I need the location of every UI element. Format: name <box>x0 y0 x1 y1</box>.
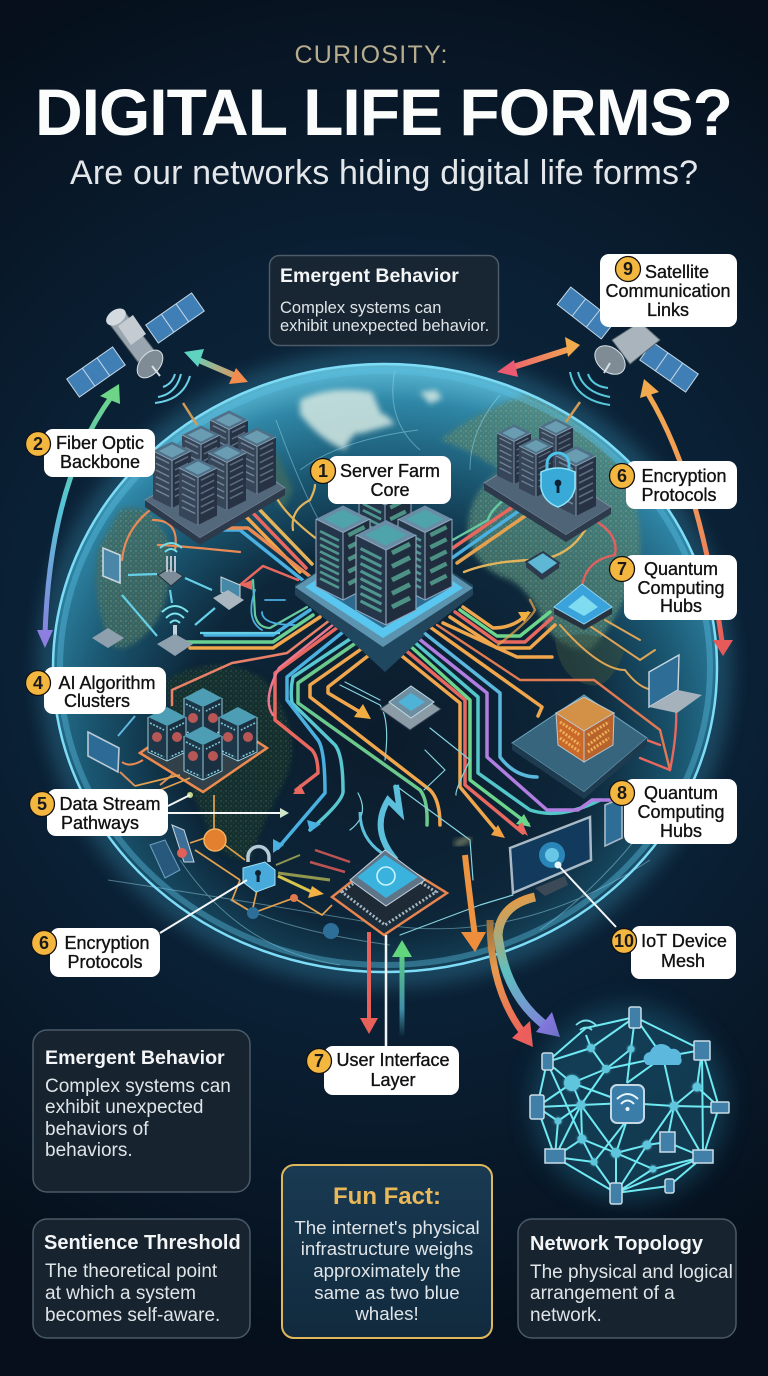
arrows: to network mesh <box>490 897 560 1047</box>
mesh edges <box>537 1017 719 1193</box>
satellite body <box>103 305 168 383</box>
land: dark southern continent <box>165 665 292 860</box>
badge 4 <box>26 670 50 696</box>
badge 10: 10 <box>614 931 634 951</box>
label 7: user interface layer <box>306 1046 459 1095</box>
body text: at which a system <box>45 1283 196 1304</box>
label 5: data stream pathways <box>30 789 168 836</box>
heading: Network Topology <box>530 1233 704 1255</box>
body text: arrangement of a <box>530 1283 675 1304</box>
label 6: encryption top: Protocols <box>641 485 717 505</box>
signal arcs <box>155 374 190 403</box>
label 6: encryption bottom: Encryption <box>64 933 150 953</box>
label 9: satellite links: Communication <box>605 281 731 301</box>
badge 6: 6 <box>39 933 49 953</box>
icon: phone near label 8 <box>605 798 622 846</box>
label 1: server farm core: Server Farm <box>340 461 440 481</box>
label 4: AI algorithm clusters: Clusters <box>64 691 130 711</box>
mesh nodes <box>554 1044 702 1172</box>
heading: Emergent Behavior <box>45 1047 225 1069</box>
land: right continent <box>440 395 641 650</box>
central lower processor chip <box>332 785 447 935</box>
arrows: user interface layer <box>360 932 412 1046</box>
orange arrow from chip <box>455 838 486 952</box>
panel: sentience threshold <box>33 1219 250 1338</box>
main title: DIGITAL LIFE FORMS? <box>35 75 733 149</box>
body text: Complex systems can <box>45 1076 231 1097</box>
small chip centre <box>380 686 441 730</box>
body text: behaviors of <box>45 1119 149 1140</box>
label 6: encryption bottom: Protocols <box>67 952 143 972</box>
panel: fun fact <box>282 1165 492 1338</box>
badge 1 <box>310 458 336 484</box>
body text: same as two blue <box>314 1282 460 1303</box>
server cluster: encryption with padlock <box>484 418 611 542</box>
arrow: satellite to globe left <box>184 349 248 384</box>
node links <box>135 775 332 915</box>
server cluster: fiber backbone <box>145 410 285 545</box>
label 1: server farm core <box>310 456 451 504</box>
body text: The internet's physical <box>294 1217 480 1238</box>
label 8: quantum hubs: Computing <box>637 802 725 822</box>
heading: Sentience Threshold <box>44 1232 241 1254</box>
body text: The physical and logical <box>530 1262 733 1283</box>
body text: behaviors. <box>45 1140 133 1161</box>
icon: wifi tower <box>158 543 183 586</box>
label 7: quantum hubs: Computing <box>637 578 725 598</box>
label 5: data stream pathways: Pathways <box>61 813 139 833</box>
chip: quantum hub <box>554 584 612 630</box>
label 7: user interface layer: Layer <box>370 1070 416 1090</box>
callout leader lines <box>160 795 616 933</box>
solar panel lower <box>67 347 125 397</box>
icon: desktop monitor <box>510 817 591 896</box>
icon: tablet left <box>88 732 119 772</box>
label 9: satellite links <box>600 254 737 327</box>
thin circuit traces <box>340 682 513 935</box>
heading: Emergent Behavior <box>280 265 459 287</box>
label 9: satellite links: Satellite <box>645 262 709 282</box>
network mesh diagram <box>530 1005 729 1204</box>
badge 6: 6 <box>617 466 627 486</box>
AI algorithm cluster <box>140 688 267 792</box>
label 2: fiber optic backbone <box>26 429 155 477</box>
panel: network topology <box>518 1219 736 1338</box>
wire arrowheads <box>240 580 531 853</box>
body text: Complex systems can <box>280 299 441 317</box>
label 2: fiber optic backbone: Backbone <box>60 452 140 472</box>
devices <box>530 1007 729 1204</box>
heading: Fun Fact: <box>333 1183 441 1210</box>
subtitle: Are our networks hiding digital life forms? <box>70 154 698 192</box>
platform: central server farm base <box>295 479 473 672</box>
land: northern pale continent <box>300 390 442 450</box>
wires: lower-right bundle <box>397 607 670 835</box>
title block <box>35 41 733 192</box>
label 2: fiber optic backbone: Fiber Optic <box>56 433 144 453</box>
arrow: long left arc <box>37 384 120 648</box>
badge 7: 7 <box>314 1051 324 1071</box>
label 6: encryption bottom <box>32 928 160 977</box>
icon: central wifi tablet <box>611 1085 644 1123</box>
label 8: quantum hubs: Hubs <box>660 821 702 841</box>
solar panel upper <box>557 287 615 339</box>
eyebrow: curiosity: CURIOSITY: <box>294 41 448 69</box>
label 7: quantum hubs: Quantum <box>644 559 718 579</box>
label 8: quantum hubs: Quantum <box>644 783 718 803</box>
body text: network. <box>530 1305 602 1326</box>
icon: wifi <box>576 1020 596 1030</box>
encryption mesh lower left <box>135 775 350 939</box>
badge 4: 4 <box>33 673 43 693</box>
arrows from padlock <box>276 850 350 898</box>
chip: quantum small <box>526 552 559 580</box>
label 10: IoT device mesh: Mesh <box>661 951 705 971</box>
icon: gateway box left <box>92 628 124 648</box>
icon: orange coin <box>204 829 226 851</box>
satellite right <box>557 287 698 422</box>
land speckle south <box>165 665 292 860</box>
icon: central server racks <box>316 479 452 625</box>
land speckle right <box>440 395 641 650</box>
label 9: satellite links: Links <box>647 300 689 320</box>
badge 8: 8 <box>617 783 627 803</box>
badge 5: 5 <box>37 794 47 814</box>
label 7: quantum hubs: Hubs <box>660 596 702 616</box>
wires: upper-right to lock cluster <box>442 495 676 770</box>
icon: padlock <box>243 846 275 892</box>
left device network <box>88 543 280 786</box>
satellite left <box>67 293 204 425</box>
label 10: IoT device mesh <box>612 926 736 979</box>
label 6: encryption top: Encryption <box>641 466 727 486</box>
icon: laptop <box>649 655 702 713</box>
satellite body <box>589 322 660 380</box>
badge 7: 7 <box>617 559 627 579</box>
callout terminals <box>280 808 562 868</box>
icon: curved up arrow <box>360 785 400 860</box>
body text: The theoretical point <box>45 1261 218 1282</box>
panel: emergent behavior top <box>270 256 498 346</box>
solar panel upper <box>146 293 204 343</box>
label 6: encryption top <box>610 461 737 509</box>
body text: whales! <box>354 1303 419 1324</box>
label 7: quantum hubs <box>610 555 737 620</box>
label 1: server farm core: Core <box>370 480 410 500</box>
badge 9: 9 <box>623 259 633 279</box>
data wires <box>122 480 676 935</box>
land speckle left <box>96 508 170 648</box>
badge 1: 1 <box>318 461 328 481</box>
arrow: satellite to globe right <box>497 337 580 377</box>
globe graticule <box>108 370 665 965</box>
body text: exhibit unexpected <box>45 1097 203 1118</box>
wires: lower-left bundle <box>172 580 440 848</box>
body text: infrastructure weighs <box>301 1238 473 1259</box>
label 7: user interface layer: User Interface <box>336 1050 450 1070</box>
icon: cloud <box>644 1044 682 1065</box>
badge 7 <box>306 1048 332 1074</box>
body text: exhibit unexpected behavior. <box>280 317 489 335</box>
land: left continent <box>96 450 293 648</box>
icon: shield padlock <box>541 453 575 507</box>
mesh nodes <box>187 792 339 939</box>
quantum computing cube <box>512 695 647 799</box>
icon: phone <box>103 548 120 583</box>
label 5: data stream pathways: Data Stream <box>59 794 161 814</box>
label 4: AI algorithm clusters: AI Algorithm <box>58 673 156 693</box>
body text: approximately the <box>313 1260 461 1281</box>
signal arcs <box>570 372 610 405</box>
icon: wifi lower <box>157 606 193 656</box>
globe <box>51 362 719 974</box>
wires: upper-left to server cluster <box>122 480 318 630</box>
icon: small laptop <box>213 577 244 610</box>
badge 2: 2 <box>33 434 43 454</box>
panel: emergent behavior <box>33 1030 250 1192</box>
label 4: AI algorithm clusters <box>26 667 166 714</box>
label 8: quantum hubs <box>610 779 737 844</box>
body text: becomes self-aware. <box>45 1305 220 1326</box>
solar panel lower <box>640 342 698 392</box>
land: centre east patch <box>555 634 625 686</box>
label 10: IoT device mesh: IoT Device <box>641 931 727 951</box>
icon: device tablets <box>150 825 194 878</box>
arrow: long right arc <box>640 379 733 656</box>
